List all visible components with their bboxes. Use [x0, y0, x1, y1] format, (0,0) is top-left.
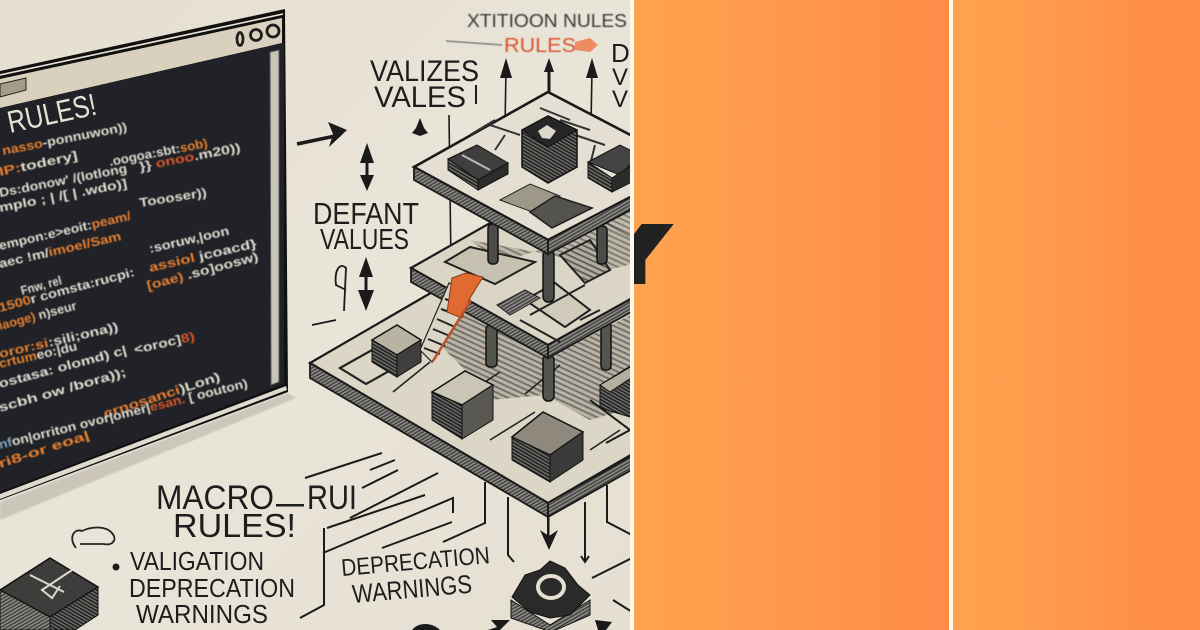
label: action rules: XTITIOON NULES [467, 11, 627, 31]
code lines: .oogoa:sbt:sob) [108, 136, 209, 169]
label: macro rules: RUI [307, 479, 357, 517]
arrow: down to gear [540, 517, 558, 550]
label: validation list: VALIGATION [130, 546, 264, 576]
code lines: Toooser)) [138, 185, 208, 210]
code lines: 1500r comsta:rucpi: [0, 265, 136, 315]
label: macro rules: RULES! [173, 507, 296, 544]
orange panel: middle [634, 0, 949, 630]
label: deprecation warnings: DEPRECATION [340, 542, 491, 582]
code lines: aec !m/ imoel/Sam [0, 229, 122, 271]
label: cropped right [612, 44, 628, 107]
connector line [449, 115, 451, 265]
label: deprecation warnings: WARNINGS [351, 569, 473, 609]
label: validates values: VALIZES [370, 55, 479, 88]
label: cropped right: D [611, 38, 630, 68]
gear block [511, 561, 590, 630]
window buttons [237, 25, 279, 46]
code lines: Fnw, rel [19, 274, 63, 298]
label: validates values: VALES [374, 81, 466, 114]
label: defant values: VALUES [320, 224, 409, 256]
label: deprecation warnings [342, 546, 489, 603]
code lines: nfon|orriton ovor|omer| esan. [ oouton) [0, 376, 249, 452]
label: cropped right: V [612, 64, 628, 91]
orange panel: right [953, 0, 1200, 630]
box: back left [372, 325, 421, 377]
motion lines [300, 453, 632, 618]
illustration panel [0, 0, 630, 630]
chip: right [587, 144, 630, 193]
code lines: Ds:donow' /(lotlong [0, 161, 128, 200]
platform: bottom [308, 292, 630, 518]
code lines: nasso-ponnuwon)) [1, 120, 128, 158]
arrow: double vertical top [360, 143, 374, 191]
platform: middle [408, 212, 630, 360]
arrow: window to stack [297, 122, 347, 147]
shaded ground under middle platform [442, 313, 630, 420]
scrollbar [270, 50, 279, 385]
code window [0, 9, 296, 520]
small marker [412, 118, 428, 136]
box: right [599, 366, 630, 418]
label: macro rules: MACRO [156, 479, 274, 517]
label: defant values [315, 203, 418, 250]
label: rules red [446, 37, 598, 53]
label: macro rules [158, 485, 354, 538]
code lines: :soruw,|oon [148, 224, 231, 256]
arrows: bottom inward [412, 620, 612, 630]
label: defant values: DEFANT [313, 196, 419, 231]
small bracket glyph [312, 266, 346, 325]
code lines: ostasa: olomd) c| [0, 343, 128, 391]
box: centre [432, 371, 493, 439]
platform: top [412, 90, 630, 256]
code lines: empon:e>eoit: peam/ [0, 209, 133, 253]
small curly glyph [72, 527, 114, 548]
pillars: lower [486, 322, 611, 401]
pillars: upper [488, 224, 607, 302]
code lines: crnosanci )Lon) [102, 370, 222, 421]
code lines: mplo ; | /[ | .wdo)] [0, 176, 128, 215]
label: rules red: RULES [504, 35, 576, 57]
arrow: double vertical bottom [358, 257, 374, 311]
code lines: oror:si :sili;ona)) [0, 320, 120, 361]
label: cropped right: V [612, 86, 628, 113]
arrows up from top platform [500, 58, 598, 115]
code lines: <oroc] 8) [133, 329, 196, 357]
code lines [0, 120, 260, 471]
label: validation list: DEPRECATION [129, 573, 295, 603]
ramp: striped staircase [420, 273, 483, 362]
label: validation list: WARNINGS [136, 599, 268, 629]
heading: rules: RULES! [4, 87, 99, 140]
code lines: [oae) .so]oosw) [145, 250, 260, 293]
label: validation list [112, 552, 294, 624]
code lines: }} onoo .m20)) [138, 141, 242, 174]
box: front [512, 412, 583, 482]
box: bottom left [0, 558, 98, 630]
code lines: assiol jcoacd} [148, 236, 258, 275]
clipped title letter: Y [601, 216, 661, 294]
chip: left [448, 145, 508, 190]
central cube [522, 116, 577, 183]
label: validates values [370, 60, 478, 108]
